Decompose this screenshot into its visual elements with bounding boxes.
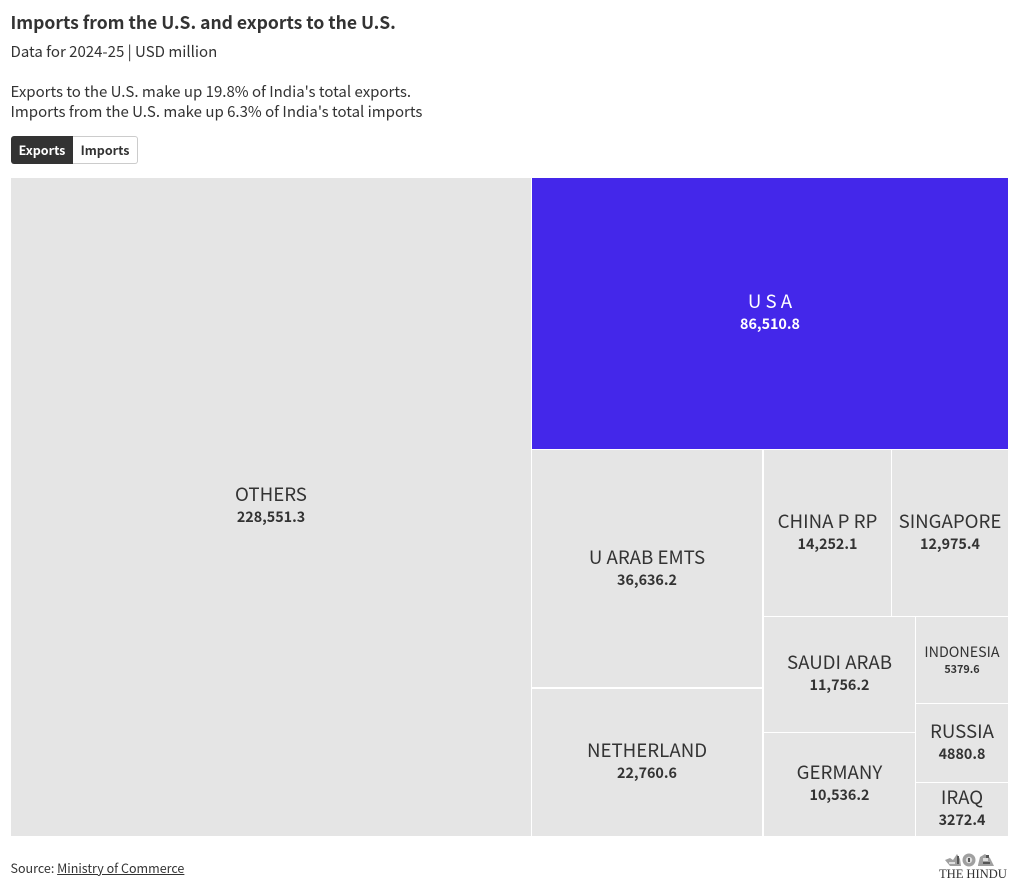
description text: Exports to the U.S. make up 19.8% of India's total exports.: [10, 81, 411, 102]
cell: Netherland: NETHERLAND: [587, 736, 707, 763]
cell: UAE: [532, 450, 762, 687]
cell: Germany: 10,536.2: [810, 784, 869, 805]
cell: Iraq: IRAQ: [941, 783, 983, 810]
cell: China: 14,252.1: [798, 533, 857, 554]
cell: Singapore: 12,975.4: [920, 533, 980, 554]
cell: others: 228,551.3: [237, 506, 305, 527]
cell: China: CHINA P RP: [778, 507, 877, 534]
cell: Saudi Arab: 11,756.2: [810, 674, 869, 695]
logo: The Hindu: [939, 854, 1007, 881]
cell: others: OTHERS: [235, 480, 307, 507]
cell: Germany: [764, 733, 915, 836]
logo emblem: [945, 854, 994, 866]
button: exports: Exports: [19, 140, 65, 159]
cell: Saudi Arab: [764, 617, 915, 732]
logo wordmark: THE HINDU: [939, 867, 1007, 881]
cell: USA: 86,510.8: [740, 313, 800, 334]
cell: Netherland: [532, 689, 762, 836]
cell: Saudi Arab: SAUDI ARAB: [787, 648, 892, 675]
button: imports: [73, 136, 138, 164]
cell: UAE: U ARAB EMTS: [589, 543, 705, 570]
cell: Indonesia: [916, 617, 1008, 703]
cell: Germany: GERMANY: [797, 758, 882, 785]
cell: UAE: 36,636.2: [617, 569, 677, 590]
title: Imports from the U.S. and exports to the U.S.: [10, 10, 396, 35]
source: Source: Ministry of Commerce: [10, 858, 184, 877]
treemap chart: [11, 178, 1008, 836]
toggle buttons: [11, 136, 138, 164]
cell: Indonesia: 5379.6: [944, 661, 980, 677]
button: imports: Imports: [81, 140, 129, 159]
cell: Russia: 4880.8: [939, 743, 985, 764]
cell: Indonesia: INDONESIA: [924, 641, 1000, 662]
cell: Russia: RUSSIA: [930, 717, 994, 744]
cell: Singapore: SINGAPORE: [899, 507, 1001, 534]
description text: Imports from the U.S. make up 6.3% of India's total imports: [10, 101, 422, 122]
cell: Iraq: 3272.4: [939, 809, 985, 830]
button: exports: [11, 136, 73, 164]
cell: USA: U S A: [748, 287, 792, 314]
cell: USA: [532, 178, 1008, 449]
cell: Russia: [916, 704, 1008, 782]
description text: [10, 81, 422, 122]
cell: Iraq: [916, 783, 1008, 836]
cell: Netherland: 22,760.6: [617, 762, 677, 783]
cell: China: [764, 450, 891, 616]
cell: others: [11, 178, 531, 836]
cell: Singapore: [892, 450, 1008, 616]
subtitle: Data for 2024-25 | USD million: [10, 41, 217, 62]
